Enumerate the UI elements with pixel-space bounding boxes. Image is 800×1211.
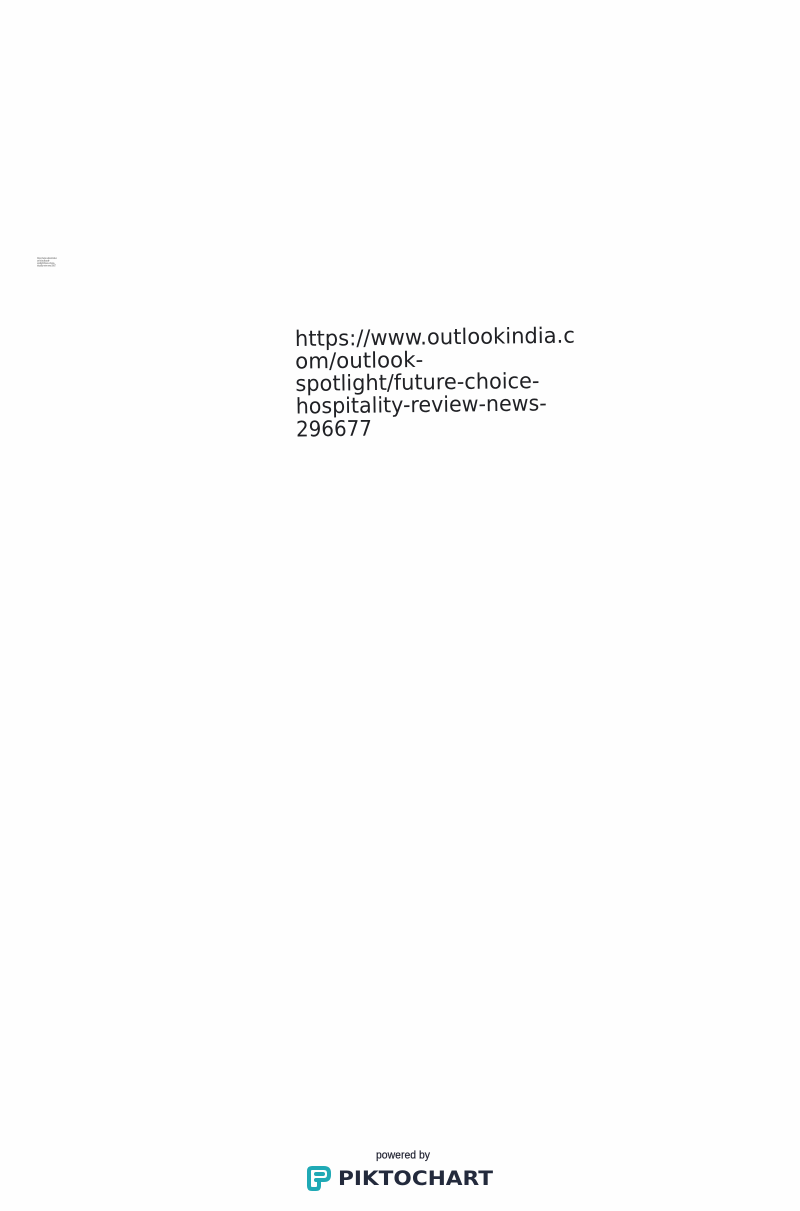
tiny text block: om/outlook- [37,258,50,262]
Piktochart wordmark: PIKTOCHART [338,1167,494,1190]
URL text block [295,324,576,442]
tiny text block: hospitality-review-news-296677 [37,264,56,268]
tiny text block [37,256,57,268]
footer: powered by Piktochart [309,1150,494,1190]
URL text block: om/outlook- [295,348,423,374]
URL text block: hospitality-review-news- [296,391,547,419]
URL text block: 296677 [296,417,372,442]
icon: Piktochart logo [309,1168,329,1189]
tiny text block: https://www.outlookindia.c [37,256,57,260]
URL text block: spotlight/future-choice- [295,369,540,397]
URL text block: https://www.outlookindia.c [295,324,575,352]
powered by label: powered by [376,1150,430,1162]
tiny text block: spotlight/future-choice- [37,261,55,265]
